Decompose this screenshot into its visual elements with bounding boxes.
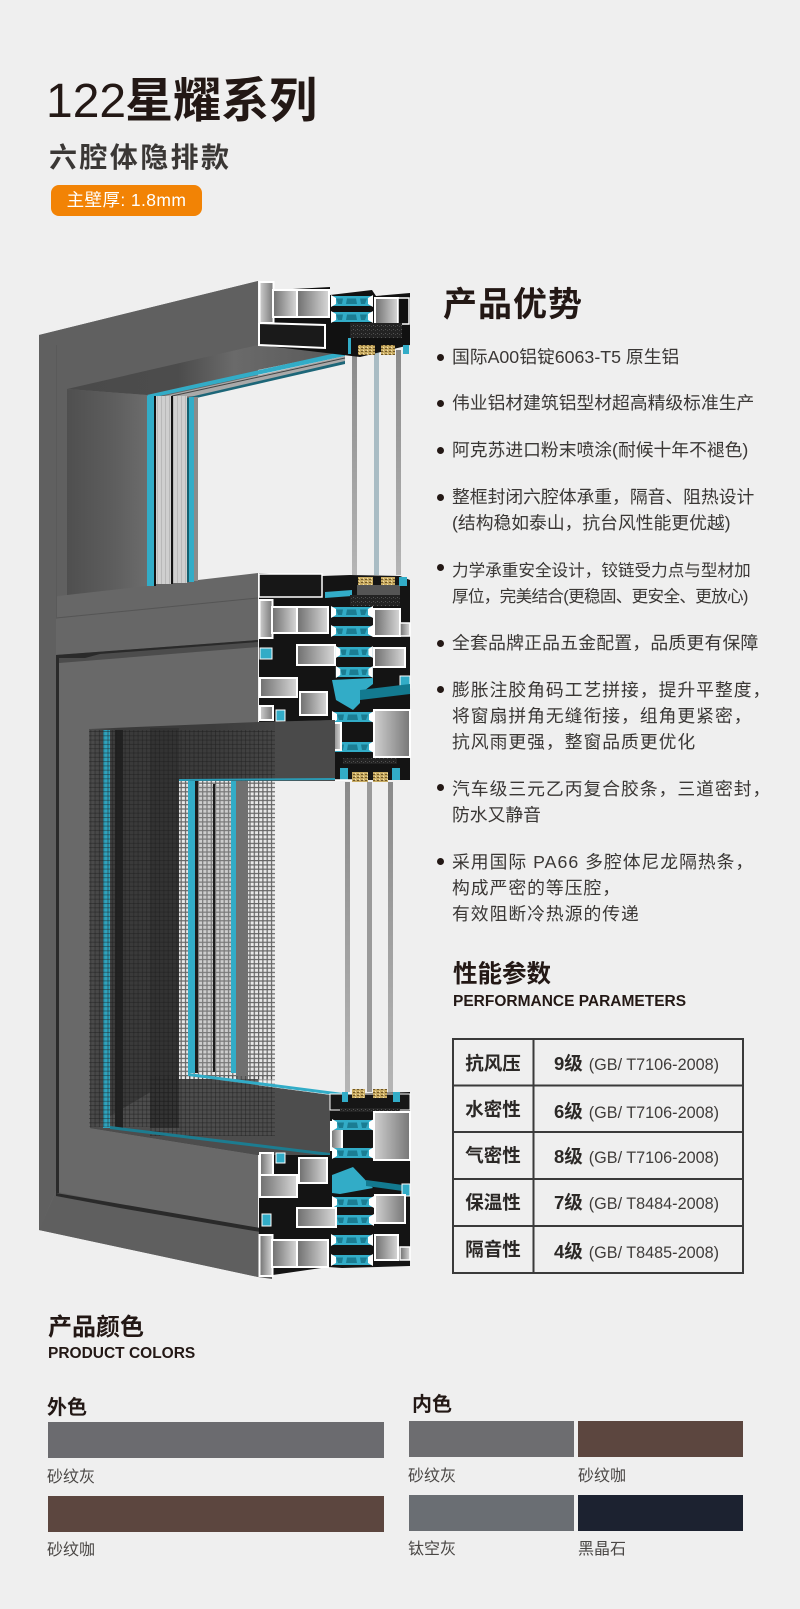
row: sound insulation: 隔音性	[465, 1239, 521, 1260]
badge: wall thickness	[51, 185, 202, 216]
subtitle: 六腔体隐排款	[49, 142, 231, 173]
advantage 4: (结构稳如泰山，抗台风性能更优越)	[452, 513, 731, 533]
row: wind pressure: 抗风压	[465, 1053, 521, 1074]
advantage 8: 防水又静音	[452, 805, 541, 825]
advantage 9	[452, 852, 754, 924]
advantage 9: 采用国际 PA66 多腔体尼龙隔热条，	[452, 852, 754, 872]
text: 4级 (GB/ T8485-2008)	[554, 1241, 719, 1262]
badge: wall thickness: 主壁厚: 1.8mm	[67, 190, 186, 210]
lower window reveal with insect screen	[89, 720, 343, 1156]
text: 6级 (GB/ T7106-2008)	[554, 1101, 719, 1122]
advantage 5: 厚位，完美结合(更稳固、更安全、更放心)	[452, 587, 748, 606]
label: sand coffee: 砂纹咖	[47, 1542, 95, 1559]
advantage 8	[452, 779, 771, 825]
advantage 6: 全套品牌正品五金配置，品质更有保障	[452, 633, 759, 653]
swatch: exterior sand grey	[48, 1422, 384, 1458]
row: thermal insulation: 保温性	[465, 1192, 521, 1213]
advantage 9: 有效阻断冷热源的传递	[452, 904, 640, 924]
subheading: product colors: PRODUCT COLORS	[48, 1345, 195, 1362]
swatch: exterior sand coffee	[48, 1496, 384, 1532]
advantage 1: 国际A00铝锭6063-T5 原生铝	[452, 347, 679, 367]
text: 7级 (GB/ T8484-2008)	[554, 1192, 719, 1213]
table: performance	[452, 1038, 744, 1274]
heading: product colors: 产品颜色	[48, 1314, 144, 1341]
advantage 2: 伟业铝材建筑铝型材超高精级标准生产	[452, 393, 754, 413]
swatch: interior sand grey	[409, 1421, 574, 1457]
label: black crystal: 黑晶石	[578, 1541, 626, 1558]
swatch: black crystal	[578, 1495, 743, 1531]
advantage 7: 抗风雨更强，整窗品质更优化	[452, 732, 696, 752]
advantage 9: 构成严密的等压腔，	[452, 878, 621, 898]
advantage 3: 阿克苏进口粉末喷涂(耐候十年不褪色)	[452, 440, 748, 460]
advantage 4: 整框封闭六腔体承重，隔音、阻热设计	[452, 487, 754, 507]
heading: performance parameters: 性能参数	[453, 961, 551, 988]
upper window reveal	[67, 345, 345, 595]
upper glass panes	[352, 350, 401, 575]
label: interior sand grey: 砂纹灰	[408, 1468, 456, 1485]
top cross-section	[259, 282, 410, 357]
frame body	[39, 281, 272, 1279]
advantage 7: 将窗扇拼角无缝衔接，组角更紧密，	[452, 706, 753, 726]
label: interior sand coffee: 砂纹咖	[578, 1468, 626, 1485]
heading: exterior color: 外色	[47, 1397, 87, 1419]
advantages list	[437, 347, 771, 924]
row: water tightness: 水密性	[465, 1099, 521, 1120]
frame grooves	[56, 345, 272, 1234]
row: air tightness: 气密性	[465, 1145, 521, 1166]
advantage 4	[452, 487, 754, 533]
subheading: performance parameters: PERFORMANCE PARAMETERS	[453, 993, 686, 1010]
text: 9级 (GB/ T7106-2008)	[554, 1053, 719, 1074]
advantage 7	[452, 680, 771, 752]
heading: product advantages: 产品优势	[443, 286, 583, 324]
text: 8级 (GB/ T7106-2008)	[554, 1146, 719, 1167]
advantage 8: 汽车级三元乙丙复合胶条，三道密封，	[452, 779, 771, 799]
advantage 5	[452, 561, 751, 606]
swatch: interior sand coffee	[578, 1421, 743, 1457]
bottom cross-section	[259, 1089, 410, 1277]
middle cross-section	[259, 573, 410, 782]
lower glass panes	[345, 782, 393, 1092]
label: sand grey: 砂纹灰	[47, 1469, 95, 1486]
swatch: titanium grey	[409, 1495, 574, 1531]
advantage 7: 膨胀注胶角码工艺拼接，提升平整度，	[452, 680, 771, 700]
heading: interior color: 内色	[412, 1394, 452, 1416]
advantage 5: 力学承重安全设计，铰链受力点与型材加	[452, 561, 751, 580]
title: 122星耀系列	[46, 75, 317, 128]
label: titanium grey: 钛空灰	[408, 1541, 456, 1558]
